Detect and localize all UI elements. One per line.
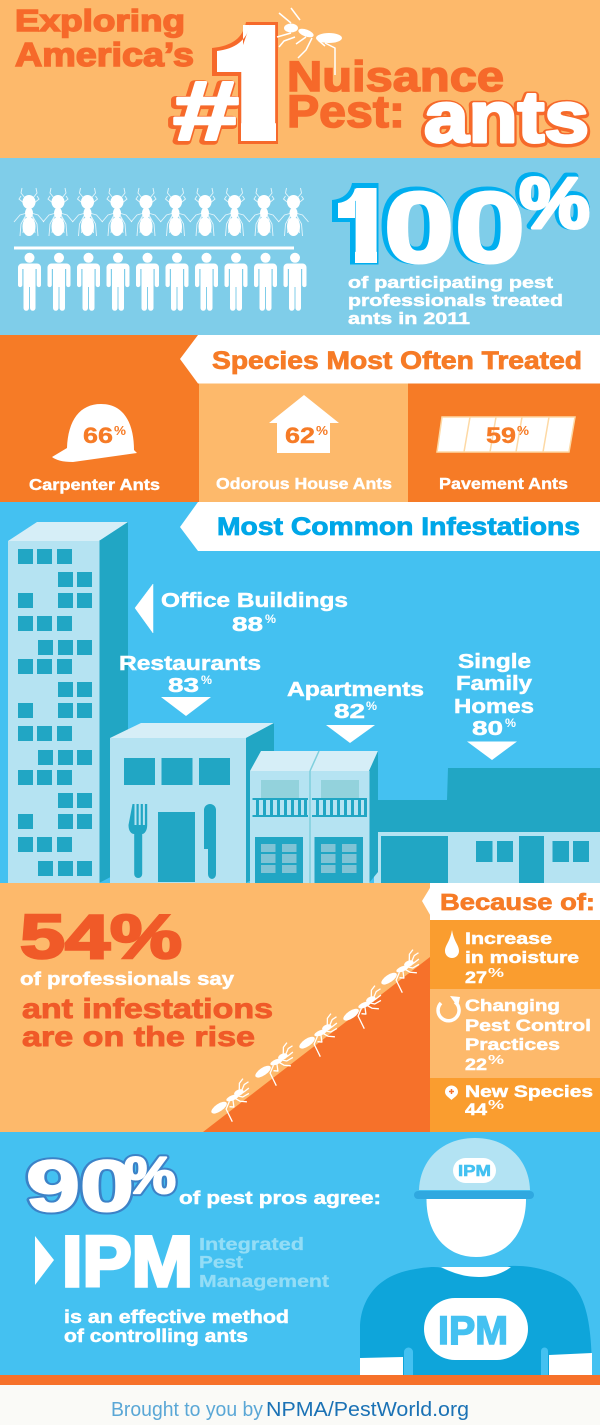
species: odorous house ants: Odorous House Ants [216,476,392,493]
text: effective method: is an effective method [64,1307,289,1327]
big number: 100%: % [517,162,588,242]
label: restaurants 83%: Restaurants [119,653,261,675]
label: office buildings 88%: % [265,612,276,626]
icon row: ten people [18,253,306,311]
label: restaurants 83%: % [201,673,212,687]
big number: 90%: 90 [26,1147,134,1227]
illustration: pest professional [360,1138,592,1375]
worker hard hat [414,1138,534,1199]
species: odorous house ants: % [316,423,328,438]
reason: increase in moisture: 27 [465,968,487,987]
big number: 90%: % [124,1147,176,1205]
worker face [426,1199,526,1257]
panel: most common infestations [0,502,600,883]
icon: knife [204,804,216,879]
label: single family homes 80%: 80 [472,718,503,740]
reason: changing pest control practices: Pest Control [465,1016,591,1035]
label: single family homes 80%: % [505,716,516,730]
statistic caption [348,273,563,328]
label: apartments 82%: % [366,699,377,713]
reason: changing pest control practices [430,989,600,1078]
text: effective method [64,1307,289,1346]
species: pavement ants: Pavement Ants [439,476,568,493]
text: ant infestations are on the rise: are on the rise [22,1021,255,1052]
heading banner: Species Most Often Treated [180,335,600,384]
icon: ant on number one [277,8,342,75]
big number: 54%: 54% [20,903,182,972]
reason: changing pest control practices: 22 [465,1055,487,1074]
species: carpenter ants: Carpenter Ants [29,477,160,494]
panel: footer credit: NPMA/PestWorld.org [266,1398,469,1421]
reason: changing pest control practices: Practices [465,1035,560,1054]
worker hard hat: IPM [458,1163,491,1180]
label: office buildings 88%: Office Buildings [161,590,348,612]
reason: changing pest control practices: % [488,1052,505,1067]
species: odorous house ants [216,395,392,493]
big number: 90%: % [124,1147,176,1205]
title text: Nuisance Pest:: Nuisance [287,53,504,101]
divider: orange footer bar [0,1375,600,1385]
label: apartments 82%: 82 [334,701,365,723]
big number: 90%: 90 [26,1147,134,1227]
worker shirt logo: IPM [438,1309,508,1353]
text: of professionals say: of professionals say [20,969,234,989]
reason: new species: New Species [465,1082,593,1101]
title text: Exploring America's: America’s [15,36,194,73]
big number: 100%: 0 [455,172,525,284]
text: ant infestations are on the rise: ant infestations [22,993,273,1024]
chart: rising slope [203,957,430,1132]
species: odorous house ants: 62 [285,423,315,448]
heading banner: Most Common Infestations [180,502,600,551]
title word: ants: ants [423,79,589,159]
label: single family homes 80%: Homes [454,696,534,718]
panel: species most often treated [0,335,600,502]
label: office buildings 88%: 88 [232,614,263,636]
big number: 90% [26,1147,176,1227]
species: pavement ants [437,417,575,493]
building: office tower [8,522,128,883]
text: effective method: of controlling ants [64,1326,248,1346]
reason: new species: % [488,1097,505,1112]
heading banner: Most Common Infestations: Most Common Infestations [217,513,580,541]
statistic caption: of participating pest [348,273,553,292]
big number: 100%: 0 [384,172,454,284]
text: integrated pest management: Pest [199,1252,243,1272]
panel: IPM 90 percent [0,1132,600,1375]
label: single family homes 80% [454,651,534,760]
text: ant infestations are on the rise [22,993,273,1052]
species: carpenter ants: % [114,423,126,438]
worker shirt logo [424,1298,528,1360]
reason: new species [430,1078,600,1132]
label: single family homes 80%: Single [458,651,531,673]
label: restaurants 83% [119,653,261,716]
species: pavement ants: 59 [486,423,516,448]
title text: Exploring America's: Exploring [15,3,185,38]
statistic caption: ants in 2011 [348,309,470,328]
text: integrated pest management: Management [199,1271,329,1291]
big number: 100%: % [519,164,590,244]
panel: title header [0,0,600,158]
species: carpenter ants: 66 [83,423,113,448]
reason: new species: 44 [465,1100,488,1119]
big number: 100%: 1 [320,165,405,287]
big number: 100% [332,172,590,264]
title numeral: #1: # [173,64,239,158]
icons: ants climbing the slope [203,948,430,1128]
panel: ant infestations on the rise [0,883,600,1132]
heading banner: Species Most Often Treated: Species Most Often Treated [212,347,582,375]
species: pavement ants: % [517,423,529,438]
panel: footer credit [0,1385,600,1425]
text: IPM: IPM [62,1223,193,1302]
icon: circular arrow [438,996,460,1021]
reason: changing pest control practices: Changing [465,996,560,1015]
icon: fork [128,804,147,878]
text: integrated pest management [199,1234,329,1291]
building: apartments [250,751,378,883]
icon: pointer triangle [35,1236,54,1285]
building: single family home [374,768,600,883]
statistic caption: professionals treated [348,291,563,310]
title text: Nuisance Pest:: Pest: [287,86,405,137]
title word: ants: ants [424,78,589,158]
label: apartments 82%: Apartments [287,679,424,701]
panel: 100 percent statistic [0,158,600,335]
reason: increase in moisture: Increase [465,929,552,948]
big number: 100%: 0 [452,170,522,282]
title text: Exploring America's [15,3,194,73]
icon row: ten ants [14,188,308,236]
building: restaurant [110,723,274,883]
reason: increase in moisture: in moisture [465,948,579,967]
panel: footer credit: Brought to you by [111,1399,263,1421]
label: apartments 82% [287,679,424,743]
banner: because of [422,883,600,920]
banner: because of: Because of: [440,889,595,915]
text: integrated pest management: Integrated [199,1234,304,1254]
title numeral: #1 [168,22,278,145]
label: single family homes 80%: Family [456,673,533,695]
icon: location pin with plus [445,1086,458,1100]
title text: Nuisance Pest: [287,53,504,137]
species: carpenter ants [29,404,160,494]
label: office buildings 88% [135,584,348,636]
big number: 100%: 0 [381,170,451,282]
reason: increase in moisture [430,920,600,989]
icon: water drop [445,930,459,958]
text: of pest pros agree: of pest pros agree: [179,1188,381,1208]
reason: increase in moisture: % [488,965,505,980]
label: restaurants 83%: 83 [168,675,199,697]
title numeral: #1: # [171,65,237,159]
